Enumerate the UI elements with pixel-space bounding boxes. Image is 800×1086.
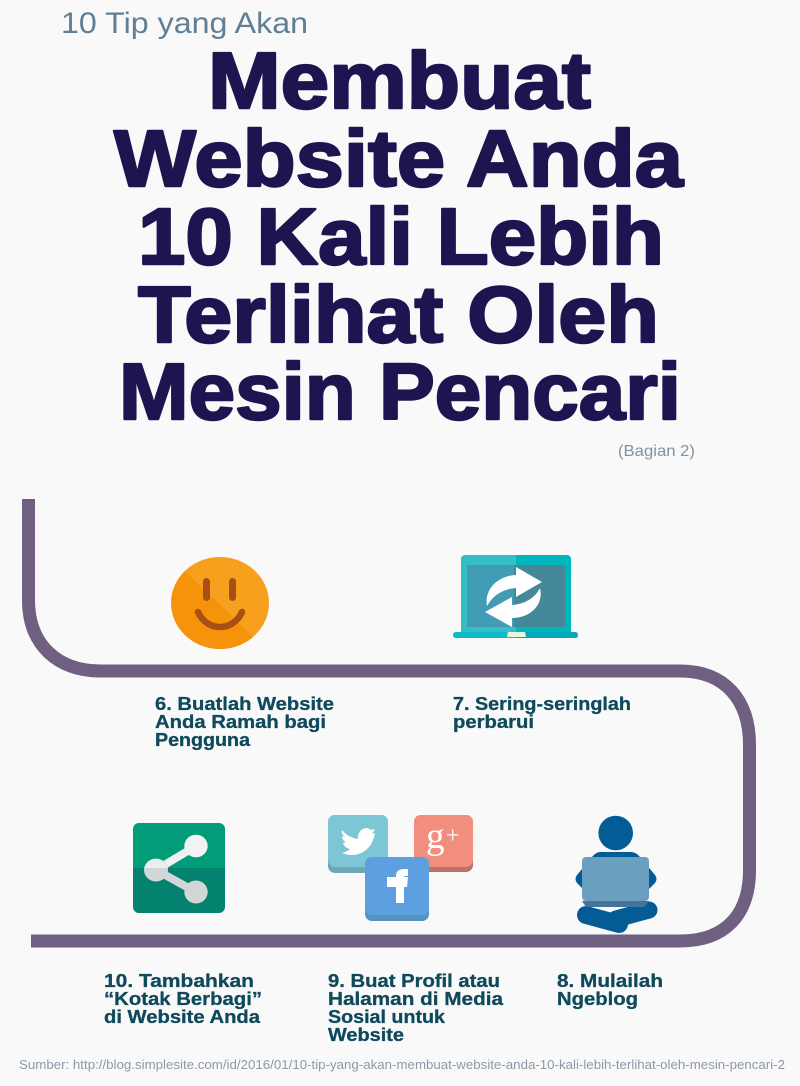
title <box>114 36 684 436</box>
title: 10 Kali Lebih <box>138 192 664 281</box>
facebook tile <box>365 857 429 921</box>
title: Mesin Pencari <box>119 347 681 436</box>
heading: tip 9: Halaman di Media <box>328 988 504 1009</box>
heading: tip 10: 10. Tambahkan <box>104 970 254 991</box>
heading: tip 10 <box>104 970 262 1027</box>
icon: social media tiles <box>328 815 473 921</box>
heading: tip 9: 9. Buat Profil atau <box>328 970 500 991</box>
heading: tip 9: Website <box>328 1024 404 1045</box>
icon: smiley <box>171 557 269 649</box>
source line: Sumber: http://blog.simplesite.com/id/2016/01/10-tip-yang-akan-membuat-website-anda-10-kali-lebih-terlihat-oleh-mesin-pencari-2 <box>19 1058 785 1072</box>
heading: tip 8: 8. Mulailah <box>557 970 663 991</box>
heading: tip 9 <box>328 970 504 1045</box>
twitter tile <box>328 815 388 873</box>
icon: laptop with refresh arrows <box>453 555 578 638</box>
heading: tip 8 <box>557 970 663 1009</box>
heading: tip 6: 6. Buatlah Website <box>155 693 334 714</box>
google plus tile: + <box>446 823 460 849</box>
title: Website Anda <box>114 114 684 203</box>
heading: tip 6: Pengguna <box>155 729 251 750</box>
timeline path <box>28 499 750 941</box>
heading: tip 7: perbarui <box>453 711 534 732</box>
heading: tip 6 <box>155 693 334 750</box>
heading: tip 6: Anda Ramah bagi <box>155 711 326 732</box>
heading: tip 10: di Website Anda <box>104 1006 261 1027</box>
heading: tip 7: 7. Sering-seringlah <box>453 693 631 714</box>
icon: person with laptop <box>576 816 656 924</box>
heading: tip 10: “Kotak Berbagi” <box>104 988 262 1009</box>
heading: tip 8: Ngeblog <box>557 988 638 1009</box>
refresh arrows <box>485 567 542 627</box>
heading: tip 7 <box>453 693 631 732</box>
kicker: 10 Tip yang Akan: 10 Tip yang Akan <box>61 7 308 40</box>
subtitle: Bagian 2: (Bagian 2) <box>618 443 695 460</box>
heading: tip 9: Sosial untuk <box>328 1006 446 1027</box>
title: Membuat <box>208 36 591 125</box>
icon: share <box>133 823 225 913</box>
google plus tile: g <box>426 816 444 857</box>
google plus tile <box>414 815 473 872</box>
title: Terlihat Oleh <box>138 270 659 359</box>
